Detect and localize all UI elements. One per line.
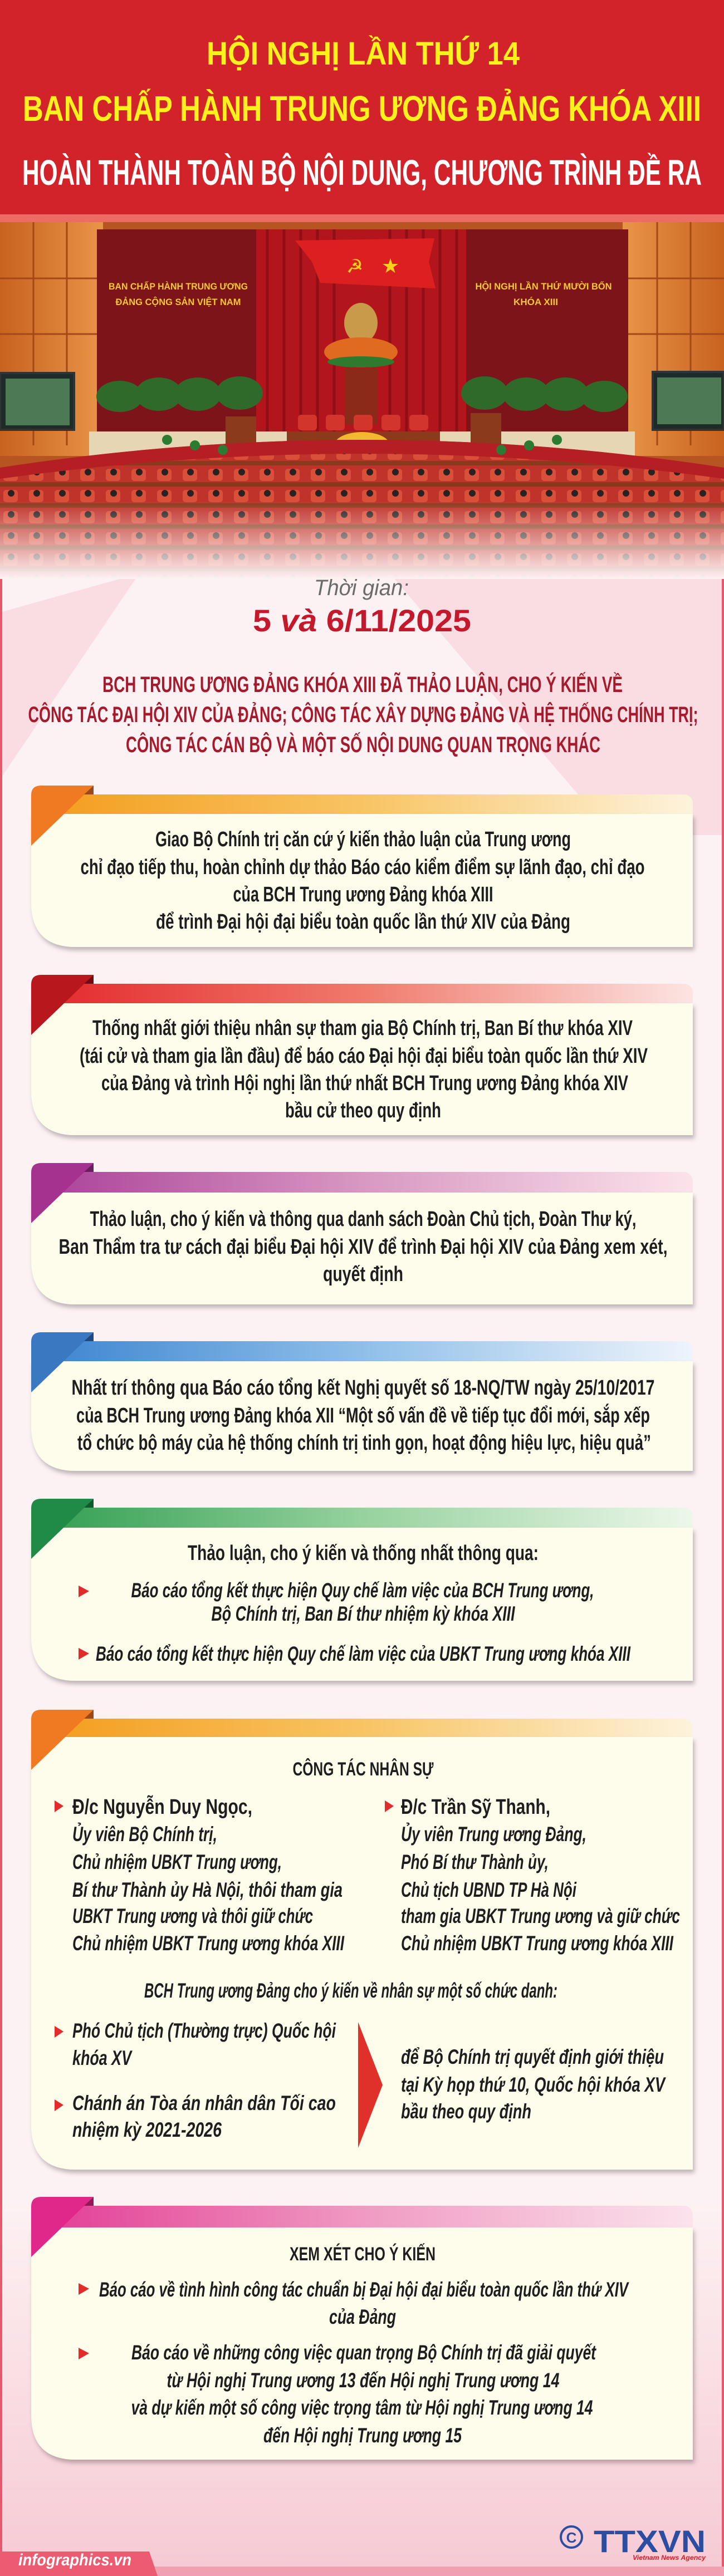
panel 3: danh sach [31, 1163, 693, 1304]
position bullet 1: khóa XV [72, 2047, 133, 2069]
panel 1 text: Giao Bộ Chính trị căn cứ ý kiến thảo luận của Trung ương [155, 828, 571, 851]
seating [0, 440, 724, 578]
panel 5 bullet 1: Bộ Chính trị, Ban Bí thư nhiệm kỳ khóa XIII [212, 1602, 515, 1625]
position bullet 2: nhiệm kỳ 2021-2026 [72, 2118, 222, 2141]
logo: TTXVN: TTXVN [594, 2524, 706, 2559]
panel 2: nhan su [31, 975, 693, 1135]
left person: Nguyen Duy Ngoc: UBKT Trung ương và thôi giữ chức [72, 1905, 313, 1927]
panel 1 text [80, 828, 645, 934]
panel 7 bullet 2 [79, 2341, 596, 2447]
plants [96, 376, 628, 412]
photo: conference hall: HỘI NGHỊ LẦN THỨ MƯỜI BỐN [476, 281, 612, 292]
panel 7 bullet 2: từ Hội nghị Trung ương 13 đến Hội nghị Trung ương 14 [167, 2369, 559, 2392]
stage [89, 431, 635, 465]
outcome text [401, 2045, 666, 2123]
left person: Nguyen Duy Ngoc: Ủy viên Bộ Chính trị, [72, 1822, 217, 1846]
panel 5 heading: Thảo luận, cho ý kiến và thống nhất thông qua: [188, 1542, 539, 1565]
right person: Tran Sy Thanh: Ủy viên Trung ương Đảng, [401, 1822, 586, 1846]
photo: conference hall: KHÓA XIII [513, 297, 558, 307]
left person: Nguyen Duy Ngoc: Chủ nhiệm UBKT Trung ương khóa XIII [72, 1932, 345, 1955]
right person: Tran Sy Thanh: Phó Bí thư Thành ủy, [401, 1851, 549, 1873]
panel 4 text [71, 1376, 655, 1455]
panel 7: xem xet cho y kien [31, 2197, 693, 2460]
panel 3 text [59, 1208, 667, 1286]
title line 1: HỘI NGHỊ LẦN THỨ 14 [207, 36, 520, 72]
panel 3 text: quyết định [323, 1263, 403, 1286]
date: 5 và 6/11/2025 [253, 603, 471, 638]
position bullet 2 [55, 2092, 336, 2141]
photo: conference hall: ĐẢNG CỘNG SẢN VIỆT NAM [116, 297, 241, 307]
panel 2 text: bầu cử theo quy định [285, 1099, 441, 1122]
right person: Tran Sy Thanh: Chủ tịch UBND TP Hà Nội [401, 1878, 576, 1901]
logo: TTXVN [561, 2524, 706, 2562]
panel 5: quy che lam viec [31, 1499, 693, 1681]
time label: Thời gian: [314, 576, 409, 600]
left person: Nguyen Duy Ngoc: Chủ nhiệm UBKT Trung ương, [72, 1851, 282, 1873]
panel 6: cong tac nhan su [31, 1710, 693, 2170]
footer: infographics.vn [18, 2551, 131, 2569]
bust, flowers, podium [344, 303, 378, 343]
panel 5 bullet 1 [79, 1579, 594, 1625]
flag: ★ [381, 254, 399, 277]
panel 2 text [80, 1017, 648, 1122]
panel 1: Bo Chinh tri [31, 786, 693, 947]
position bullet 1 [55, 2019, 336, 2069]
backdrop texts: BAN CHẤP HÀNH TRUNG ƯƠNG [109, 281, 248, 292]
panel 7 bullet 1 [79, 2278, 629, 2328]
right person: Tran Sy Thanh [385, 1795, 680, 1955]
panel 4: Nghi quyet 18 [31, 1332, 693, 1471]
panel 7 bullet 1: của Đảng [329, 2305, 396, 2328]
left person: Nguyen Duy Ngoc: Bí thư Thành ủy Hà Nội, thôi tham gia [72, 1878, 343, 1901]
outcome text: bầu theo quy định [401, 2100, 531, 2123]
summary text [28, 671, 698, 757]
photo: conference hall [0, 222, 724, 579]
footer [0, 2551, 724, 2576]
position bullet 2: Chánh án Tòa án nhân dân Tối cao [72, 2092, 336, 2114]
left person: Nguyen Duy Ngoc [55, 1794, 345, 1955]
flag [295, 238, 436, 288]
panel 7 heading: XEM XÉT CHO Ý KIẾN [290, 2244, 436, 2265]
position bullet 1: Phó Chủ tịch (Thường trực) Quốc hội [72, 2019, 336, 2042]
panel 7 bullet 2: đến Hội nghị Trung ương 15 [263, 2424, 462, 2447]
right person: Tran Sy Thanh: Đ/c Trần Sỹ Thanh, [401, 1795, 550, 1819]
logo: TTXVN: C [566, 2529, 577, 2546]
arrow [358, 2022, 383, 2148]
header banner [0, 0, 724, 222]
left person: Nguyen Duy Ngoc: Đ/c Nguyễn Duy Ngọc, [72, 1794, 252, 1819]
screens [0, 373, 74, 430]
logo: TTXVN: Vietnam News Agency [633, 2554, 706, 2562]
panel 1 text: để trình Đại hội đại biểu toàn quốc lần thứ XIV của Đảng [156, 910, 570, 934]
panel 1 text: của BCH Trung ương Đảng khóa XIII [233, 883, 493, 906]
flag: ☭ [346, 256, 363, 277]
panel 6 heading: CÔNG TÁC NHÂN SỰ [293, 1758, 434, 1780]
